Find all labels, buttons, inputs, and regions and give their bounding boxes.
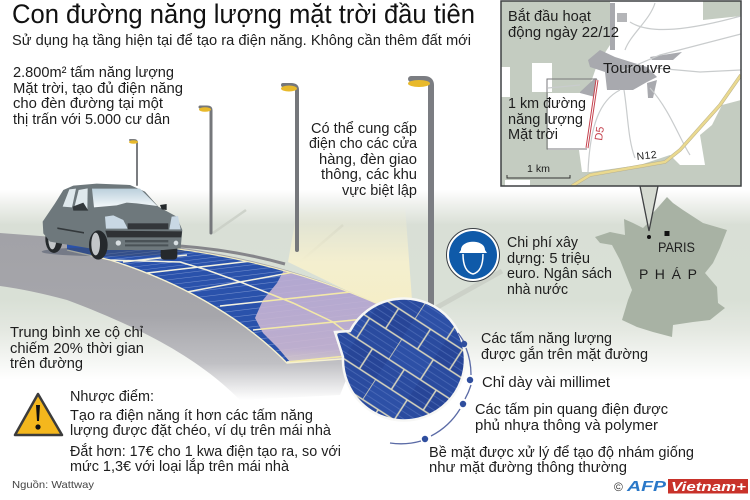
locator map [501,1,741,186]
text block: drawbacks: Tạo ra điện năng ít hơn các tấm năng [70,407,313,424]
text block: panel facts [429,330,694,476]
callout arc with dots [390,333,473,444]
map solar section box [547,79,597,149]
map start date: Bắt đầu hoạt [508,8,592,25]
text block: road usage: trên đường [10,355,83,372]
map of France [595,197,727,337]
text block: panel facts: như mặt đường thông thường [429,459,627,476]
logo: AFP Vietnam+ [614,478,748,495]
logo: AFP Vietnam+: Vietnam+ [671,479,747,494]
street lamps [129,79,431,315]
right wheel [161,245,177,260]
text block: drawbacks: Đắt hơn: 17€ cho 1 kwa điện tạo ra, so với [70,443,341,460]
rear wheel [45,225,63,253]
logo: AFP Vietnam+: AFP [626,478,667,495]
map label solar section: Mặt trời [508,126,558,143]
map scale bar: 1 km [527,164,550,175]
text block: supply: vực biệt lập [342,182,417,199]
map land: white areas [501,1,741,186]
map label solar section: năng lượng [508,111,583,128]
car body [43,184,182,250]
bumper [105,231,182,237]
map label solar section: 1 km đường [508,95,586,112]
logo: AFP Vietnam+: © [614,480,623,494]
panel close-up circle [335,298,465,420]
map scale bar [507,164,570,178]
map of France: PARIS [658,239,695,255]
text block: cost: Chi phí xây [507,234,578,251]
light cone [288,205,412,310]
map town [580,3,682,98]
grille [128,223,168,229]
map label solar section [508,95,586,143]
text block: panel facts: Bề mặt được xử lý để tạo độ nhám giống [429,444,694,461]
subtitle: Sử dụng hạ tầng hiện tại để tạo ra điện năng. Không cần thêm đất mới [12,32,471,49]
map N12 road [572,75,741,186]
map minor roads [548,3,741,172]
text block: area [13,64,183,128]
map D5 road [587,80,597,148]
map start date [508,8,619,41]
front wheel [89,230,108,260]
map label N12: N12 [636,149,657,163]
text block: area: Mặt trời, tạo đủ điện năng [13,80,183,97]
solar panel strip [67,244,377,364]
text block: drawbacks: lượng được đặt chéo, ví dụ trên mái nhà [70,422,332,439]
street lamp shadows [213,210,502,309]
road [0,233,387,400]
text block: panel facts: Các tấm pin quang điện được [475,401,668,418]
icon: hard hat sign [446,228,500,282]
text block: road usage: chiếm 20% thời gian [10,340,144,357]
map start date: động ngày 22/12 [508,24,619,41]
text block: supply: điện cho các cửa [309,135,418,152]
text block: drawbacks: mức 1,3€ với loại lắp trên mái nhà [70,458,290,475]
map of France: P H Á P [639,266,697,282]
map callout pointer [640,186,658,231]
text block: supply [309,120,418,199]
text block: supply: thông, các khu [321,166,417,183]
text block: panel facts: được gắn trên mặt đường [481,346,648,363]
side windows [75,188,88,211]
text block: panel facts: phủ nhựa thông và polymer [475,417,658,434]
source: Nguồn: Wattway [12,479,95,491]
text block: cost [507,234,612,298]
map label D5: D5 [593,126,607,141]
text block: cost: nhà nước [507,281,568,298]
map label Tourouvre: Tourouvre [603,60,671,77]
windshield [92,189,157,207]
map frame [501,1,741,186]
text block: drawbacks: Nhược điểm: [70,388,154,405]
text block: cost: euro. Ngân sách [507,265,612,282]
text block: panel facts: Các tấm năng lượng [481,330,612,347]
text block: panel facts: Chỉ dày vài millimet [482,374,611,391]
text block: supply: Có thể cung cấp [311,120,417,137]
headlights [105,215,128,229]
text block: cost: dựng: 5 triệu [507,250,590,267]
text block: supply: hàng, đèn giao [319,151,417,168]
text block: road usage: Trung bình xe cộ chỉ [10,324,144,341]
text block: area: cho đèn đường tại một [13,95,164,112]
text block: area: 2.800m² tấm năng lượng [13,64,174,81]
text block: road usage [10,324,144,372]
text block: area: thị trấn với 5.000 cư dân [13,111,170,128]
car [42,184,185,260]
icon: warning triangle [15,394,62,435]
text block: drawbacks [70,388,341,475]
